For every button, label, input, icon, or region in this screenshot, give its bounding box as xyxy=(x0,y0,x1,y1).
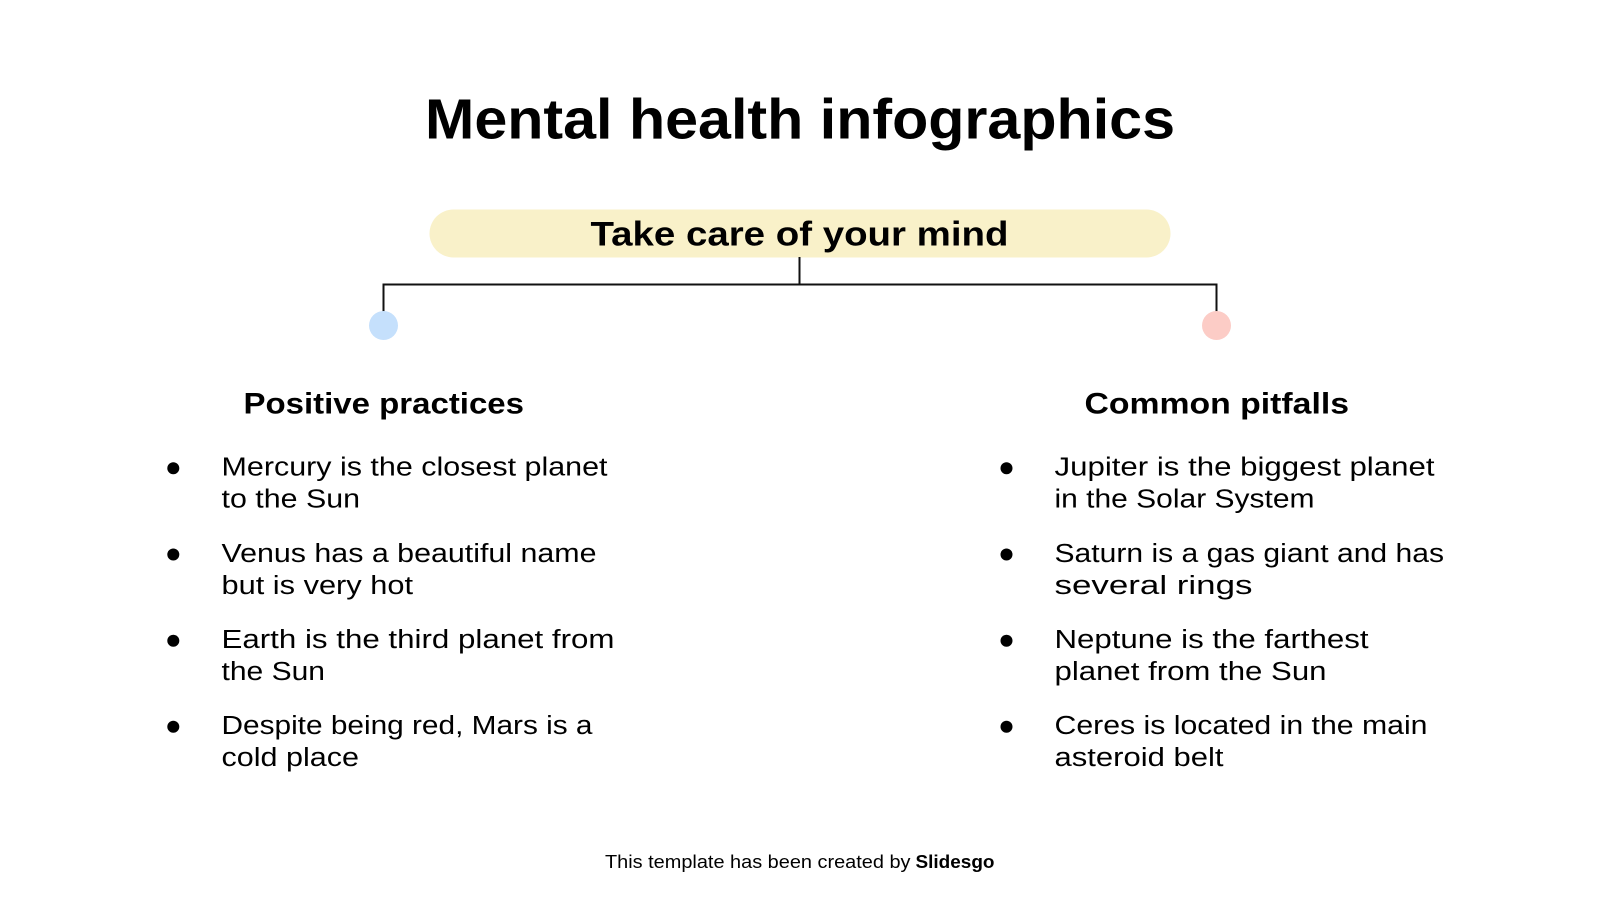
list item: Mars xyxy=(167,712,593,772)
list item: Jupiter xyxy=(1000,454,1434,514)
central pill: Take care of your mind: Take care of your mind xyxy=(590,216,1008,254)
central pill: Take care of your mind xyxy=(430,210,1170,258)
list item: Mars: cold place xyxy=(222,744,359,772)
footer credit: This template has been created by xyxy=(605,851,911,872)
list item: Earth: the Sun xyxy=(222,658,325,686)
list item: Mars: Despite being red, Mars is a xyxy=(222,712,593,740)
list item: Jupiter: in the Solar System xyxy=(1054,486,1314,514)
title: Mental health infographics xyxy=(425,88,1175,150)
panel: common pitfalls xyxy=(1000,388,1444,772)
list item: Neptune: planet from the Sun xyxy=(1054,658,1326,686)
footer credit: Slidesgo xyxy=(916,851,994,872)
heading: positive practices: Positive practices xyxy=(244,388,524,420)
list item: Jupiter: Jupiter is the biggest planet xyxy=(1054,454,1434,482)
list item: Venus xyxy=(167,540,597,600)
node: blue circle xyxy=(369,311,398,340)
list item: Venus: but is very hot xyxy=(222,572,413,600)
list item: Earth xyxy=(167,626,615,686)
list item: Mercury: to the Sun xyxy=(222,486,360,514)
list item: Saturn xyxy=(1000,540,1444,600)
list item: Mercury: Mercury is the closest planet xyxy=(222,454,608,482)
list item: Earth: Earth is the third planet from xyxy=(222,626,614,654)
list item: Saturn: several rings xyxy=(1054,572,1252,600)
list item: Saturn: Saturn is a gas giant and has xyxy=(1054,540,1444,568)
list item: Neptune xyxy=(1000,626,1368,686)
list item: Mercury xyxy=(167,454,608,514)
heading: common pitfalls: Common pitfalls xyxy=(1084,388,1349,420)
list item: Ceres: Ceres is located in the main xyxy=(1054,712,1428,740)
node: pink circle xyxy=(1202,311,1231,340)
panel: positive practices xyxy=(167,388,615,772)
list item: Ceres xyxy=(1000,712,1428,772)
list item: Neptune: Neptune is the farthest xyxy=(1054,626,1368,654)
connector tree xyxy=(384,257,1216,312)
list item: Venus: Venus has a beautiful name xyxy=(222,540,596,568)
list item: Ceres: asteroid belt xyxy=(1054,744,1224,772)
